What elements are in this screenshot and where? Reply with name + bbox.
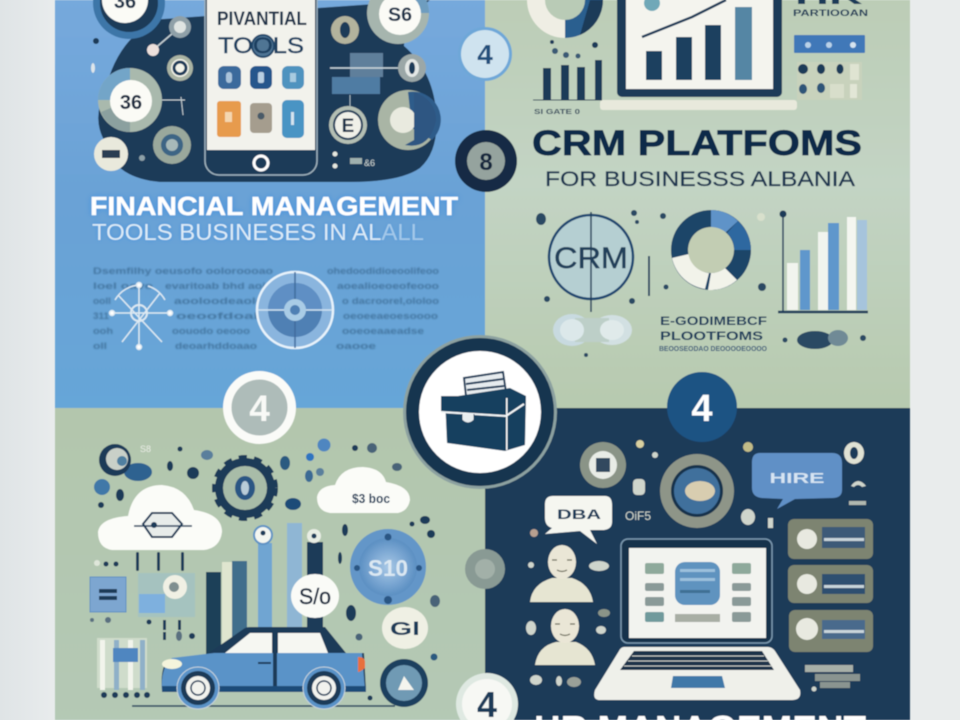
phone heading: PIVANTIAL [217,9,307,30]
circle badge left [98,68,162,132]
percent bubble [291,574,339,618]
panel: operations and logistics [55,408,485,720]
person one [530,545,593,602]
panel: CRM platforms [485,0,910,408]
badge: number 4 gray: 4 [249,388,270,429]
scattered marks [536,210,766,357]
laptop base [594,647,800,700]
blue speech bubble [752,453,842,509]
blue speech bubble: HIRE [770,470,824,487]
badge: number 4 gray [223,371,296,444]
E circle: E [342,116,354,137]
body text columns: ohedoodidioeoolifeoo [327,266,440,276]
CRM magnifier circle [549,212,633,312]
donut chart top [527,0,603,38]
donut chart [671,210,751,290]
panel: financial management tools [55,0,485,408]
laptop [594,539,800,700]
grey keypad panel [797,62,862,100]
small circle icon right [398,54,426,82]
sub heading: TOOLS BUSINESES IN AL ALL [92,219,424,245]
scattered marks [526,440,866,692]
bar chart right [778,210,868,312]
scattered marks [90,438,440,700]
top right label [793,0,868,18]
sub heading: FOR BUSINESSS ALBANIA [545,168,855,191]
translucent window chart [330,53,402,108]
e-commerce caption: PLOOTFOMS [660,329,763,343]
car [132,627,395,709]
badge: number 4 dark blue: 4 [691,388,713,430]
light blue folder icon [138,573,195,617]
small cloud [317,467,410,513]
body text columns: ooh [93,326,113,336]
small bar chart [533,40,602,116]
circle badge top right [367,0,429,44]
body text columns: oouodo oeooo [172,326,251,336]
small cloud: $3 boc [352,491,390,506]
node connector [147,16,191,115]
badge: small gray [465,549,505,589]
person two [535,609,595,665]
circle icon bottom left [153,126,191,164]
keyboard [620,651,774,670]
bar chart behind car [206,523,323,656]
body text columns: ooeoeaaeadse [342,326,424,336]
laptop screen [629,548,766,638]
dark round icon [380,659,428,707]
body text columns: ooll [93,296,111,306]
handshake icon [553,314,632,346]
e-commerce caption: BEOOSEODAO DEOOOOEOOOO [659,346,768,353]
body text columns [93,266,440,351]
phone app icons [217,66,304,138]
phone heading second line: TOOLS [218,33,304,58]
top right label: PARTIOOAN [793,8,868,18]
e-commerce caption [659,314,768,353]
badge: number 4 top: 4 [477,39,493,70]
circle badge left: 36 [120,92,142,114]
white speech bubble: DBA [557,506,601,522]
large cloud [98,485,222,550]
e-commerce caption: E-GODIMEBCF [660,314,767,328]
main heading: CRM PLATFOMS [532,124,862,163]
body text columns: 311 [93,311,109,321]
body text columns: oaooe [336,341,376,351]
icon: glowing target [257,272,333,348]
body text columns: aooloodeaoloa [174,296,274,306]
white speech bubble [545,496,612,544]
percent bubble: S/o [299,584,331,609]
circle icon top left [580,442,626,488]
blue button panel [794,35,865,53]
body text columns: oeoofdoala [176,311,270,321]
circle O [167,55,193,81]
badge: number 4 top [458,27,512,81]
body text columns: oll [93,341,107,351]
blue medallion: S10 [368,555,408,581]
badge: number 8: 8 [479,149,493,176]
monitor with bar chart [600,0,797,110]
dark cloud backdrop [98,0,437,182]
badge: number 8 [455,130,517,192]
icon: network star [110,282,172,350]
blue medallion [350,529,426,605]
scattered marks: OiF5 [625,509,651,523]
E circle [329,106,367,144]
main heading: FINANCIAL MANAGEMENT [90,191,458,221]
status panels [788,519,873,652]
trackpad [671,676,725,688]
icon: briefcase [441,372,526,451]
central circular icon [660,454,734,528]
phone [205,0,317,175]
center briefcase badge [403,335,557,489]
gear [215,458,275,518]
eye icon bottom right [782,330,866,349]
body text columns: evaritoab bhd aoio [165,281,274,291]
body text columns: deoarhddoaao [175,341,258,351]
small icon top right [331,16,359,44]
location pin [99,444,152,481]
badge: number 4 dark blue [667,372,737,442]
small marks near phone [91,38,375,168]
badge: number 4 bottom [456,673,518,720]
crescent chart [378,90,441,150]
CRM magnifier circle: CRM [554,242,628,275]
body text columns: o dacroorel,ololoo [342,296,440,306]
gate chart icon [97,638,150,698]
circle badge top left [93,0,165,39]
body text columns: aoealioeoeofeooo [337,281,440,291]
small marks near phone: &6 [364,158,375,168]
cloud drips [94,552,184,571]
circle badge top right: S6 [388,5,412,26]
panel: HR management [485,408,910,720]
body text columns: oeoeeaeoesoooo [343,311,439,321]
body text columns: loel oavo [93,281,154,291]
cream circle icon [94,137,128,171]
small chart label: SI GATE 0 [534,109,580,116]
cream pill icon: Gl [390,619,420,639]
cream pill icon [382,607,428,649]
scattered marks: S8 [140,444,151,454]
chart markers [254,526,321,544]
body text columns: Dsemfilhy oeusofo ooloroooao [93,266,274,276]
blue document icon [90,577,126,612]
